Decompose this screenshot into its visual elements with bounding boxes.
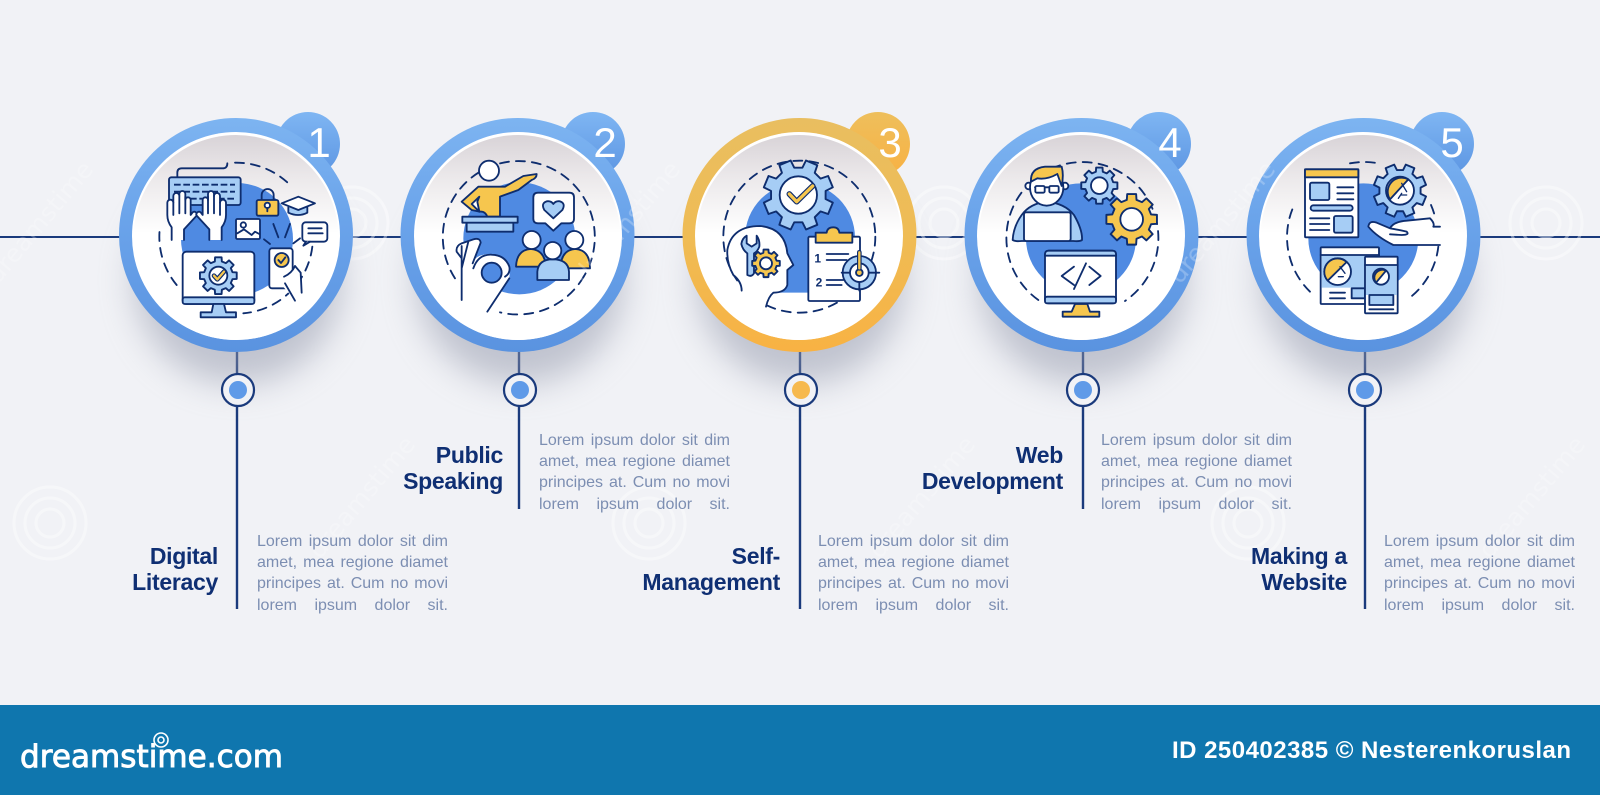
horizontal timeline line <box>0 236 1600 238</box>
timeline nodes <box>222 374 1381 406</box>
text: step 5 description: Lorem ipsum dolor sit dim <box>1384 533 1575 550</box>
watermark text: dreamstime <box>1162 155 1281 289</box>
heading: Self-Management: Self- <box>732 543 780 569</box>
node 1 <box>222 374 254 406</box>
step 4 circle shadow <box>979 176 1187 384</box>
step 5 <box>1246 112 1480 609</box>
step 1 ring <box>119 118 353 352</box>
step 3 inner disc <box>695 132 903 340</box>
text: step 4 description: Lorem ipsum dolor sit dim <box>1101 432 1292 449</box>
node 3 <box>785 374 817 406</box>
step 3 <box>682 112 916 609</box>
step 2 inner disc <box>414 132 622 340</box>
heading: Public Speaking <box>403 442 503 494</box>
step 2 number: 2 <box>593 119 617 166</box>
icon: self-management <box>723 150 879 313</box>
step 5 badge <box>1410 112 1474 176</box>
text: step 1 description: lorem ipsum dolor sit. <box>257 597 448 614</box>
step 3 circle shadow <box>697 176 905 384</box>
step 5 inner disc <box>1259 132 1467 340</box>
step 5 connector <box>1364 350 1366 609</box>
text: step 2 description: principes at. Cum no movi <box>539 474 730 491</box>
step 3 badge <box>846 112 910 176</box>
node 5 <box>1349 374 1381 406</box>
step 1 connector <box>236 350 238 609</box>
step 4 <box>964 112 1198 509</box>
heading: Web Development <box>922 442 1063 494</box>
text: step 1 description <box>257 533 448 614</box>
icon: making a website <box>1287 156 1440 313</box>
step 4 badge <box>1127 112 1191 176</box>
text: step 5 description: principes at. Cum no movi <box>1384 575 1575 592</box>
step 1 circle shadow <box>134 176 342 384</box>
step 4 inner disc <box>977 132 1185 340</box>
icon: web development <box>1006 162 1158 317</box>
icon: self-management: 2 <box>816 276 823 290</box>
heading: Web Development: Development <box>922 468 1063 494</box>
text: step 2 description: lorem ipsum dolor sit. <box>539 496 730 513</box>
text: step 3 description: Lorem ipsum dolor sit dim <box>818 533 1009 550</box>
step 4 connector <box>1082 350 1084 509</box>
watermark text: dreamstime <box>862 430 981 564</box>
heading: Making a Website: Making a <box>1251 543 1347 569</box>
step 3 number: 3 <box>878 119 902 166</box>
text: step 3 description: lorem ipsum dolor sit. <box>818 597 1009 614</box>
text: step 1 description: principes at. Cum no movi <box>257 575 448 592</box>
watermark swirls <box>14 187 1582 559</box>
logo swirl <box>154 733 168 747</box>
text: step 2 description <box>539 432 730 513</box>
step 2 badge <box>561 112 625 176</box>
step 3 connector <box>799 350 801 609</box>
icon: self-management: 1 <box>814 251 821 265</box>
text: step 5 description: lorem ipsum dolor sit. <box>1384 597 1575 614</box>
step 4 number: 4 <box>1158 119 1182 166</box>
step 5 number: 5 <box>1440 119 1464 166</box>
step 2 connector <box>518 350 520 509</box>
watermark text: dreamstime <box>1472 430 1591 564</box>
text: step 3 description <box>818 533 1009 614</box>
step 2 circle shadow <box>416 176 624 384</box>
text: step 1 description: Lorem ipsum dolor sit dim <box>257 533 448 550</box>
step 5 ring <box>1246 118 1480 352</box>
step 1 badge <box>276 112 340 176</box>
step 1 number: 1 <box>307 119 331 166</box>
step 2 <box>400 112 634 509</box>
step 3 ring <box>682 118 916 352</box>
step 2 ring <box>400 118 634 352</box>
heading: Digital Literacy: Digital <box>150 543 218 569</box>
text: step 5 description <box>1384 533 1575 614</box>
heading: Self-Management: Management <box>642 569 780 595</box>
icon: public speaking <box>443 161 595 314</box>
step 1 inner disc <box>132 132 340 340</box>
text: step 3 description: amet, mea regione diamet <box>818 554 1009 571</box>
icon: digital literacy <box>159 163 327 317</box>
footer bar <box>0 705 1600 795</box>
heading: Public Speaking: Speaking <box>403 468 503 494</box>
step 5 circle shadow <box>1261 176 1469 384</box>
heading: Making a Website: Website <box>1261 569 1347 595</box>
node 2 <box>504 374 536 406</box>
text: step 2 description: Lorem ipsum dolor sit dim <box>539 432 730 449</box>
heading: Digital Literacy: Literacy <box>132 569 218 595</box>
watermark text: dreamstime <box>567 155 686 289</box>
watermark text: dreamstime <box>302 430 421 564</box>
heading: Self-Management <box>642 543 780 595</box>
step 1 <box>119 112 353 609</box>
footer logo: dreamstime.com <box>20 739 283 775</box>
heading: Public Speaking: Public <box>436 442 503 468</box>
watermark text <box>0 155 1591 564</box>
text: step 1 description: amet, mea regione diamet <box>257 554 448 571</box>
text: step 4 description <box>1101 432 1292 513</box>
heading: Digital Literacy <box>132 543 218 595</box>
heading: Web Development: Web <box>1016 442 1063 468</box>
text: step 4 description: amet, mea regione diamet <box>1101 453 1292 470</box>
step 4 ring <box>964 118 1198 352</box>
text: step 4 description: principes at. Cum no movi <box>1101 474 1292 491</box>
heading: Making a Website <box>1251 543 1348 595</box>
footer credit: ID 250402385 © Nesterenkoruslan <box>1172 737 1571 764</box>
text: step 2 description: amet, mea regione diamet <box>539 453 730 470</box>
node 4 <box>1067 374 1099 406</box>
text: step 5 description: amet, mea regione diamet <box>1384 554 1575 571</box>
text: step 3 description: principes at. Cum no movi <box>818 575 1009 592</box>
text: step 4 description: lorem ipsum dolor sit. <box>1101 496 1292 513</box>
